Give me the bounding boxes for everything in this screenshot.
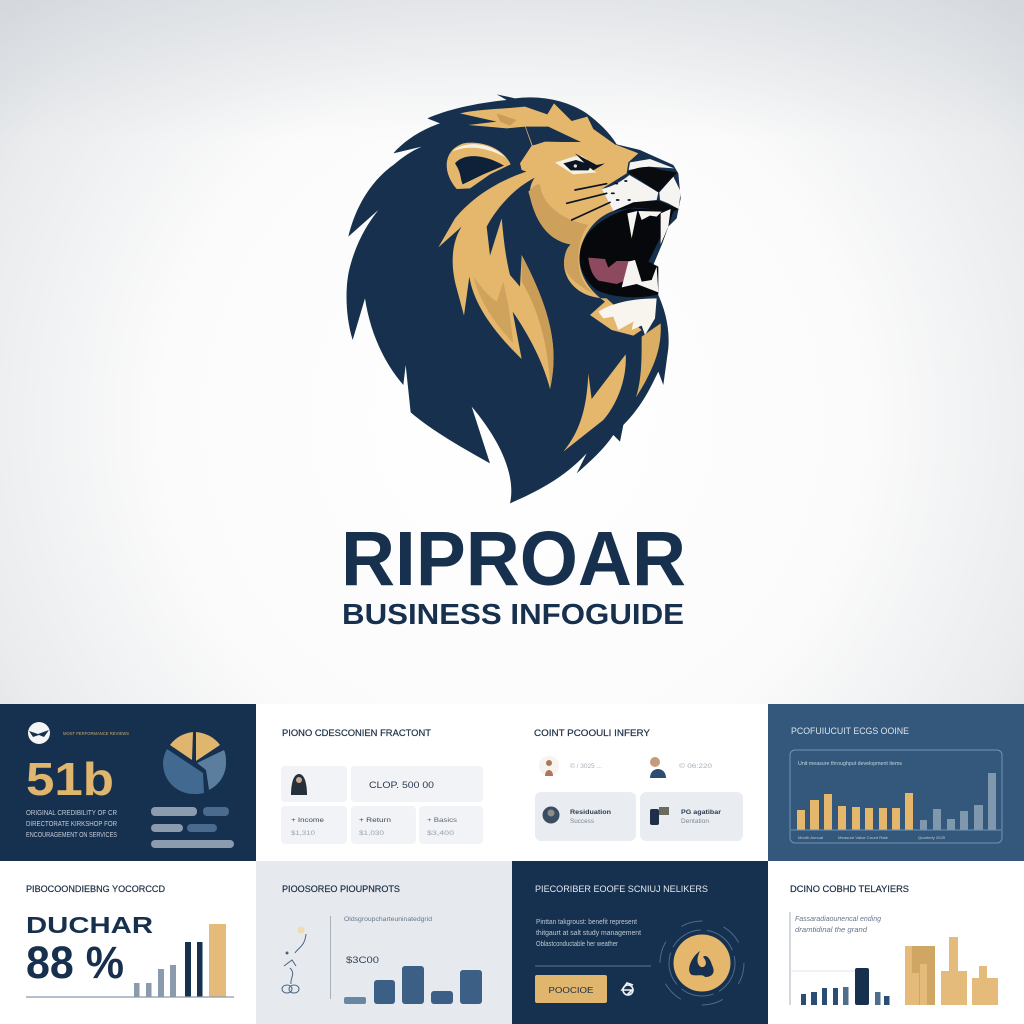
divider (535, 965, 651, 967)
panel: contact cards (256, 704, 512, 861)
profile card two (640, 792, 743, 841)
gold caption: MOST PERFORMANCE REVIEWS (63, 731, 129, 736)
heading: PCOFUIUCUIT ECGS OOINE (791, 726, 909, 737)
panel: bar chart blue (768, 704, 1024, 861)
lion mane silhouette (347, 94, 681, 503)
info cards (281, 766, 483, 844)
button: POOCIOE (548, 985, 594, 995)
card details: $1,310 (291, 831, 316, 837)
panel: lion call to action (512, 861, 768, 1024)
heading: DCINO COBHD TELAYIERS (790, 884, 909, 895)
title: RIPROAR (341, 516, 686, 602)
heading: PIONO CDESCONIEN FRACTONT (282, 728, 431, 739)
value: $3C00 (346, 955, 379, 966)
card details: $3,400 (427, 831, 455, 837)
card details: + Income (291, 818, 325, 824)
heading: PIBOCOONDIEBNG YOCORCCD (26, 884, 165, 895)
profile card one: Residuation (570, 809, 611, 816)
panel: mixed bar chart (768, 861, 1024, 1024)
description text (536, 919, 641, 948)
chart caption: Unit measure throughput development items (798, 761, 902, 767)
gold bars (905, 937, 998, 1005)
description text: DIRECTORATE KIRKSHOP FOR (26, 821, 117, 828)
panel: percentage metric (0, 861, 256, 1024)
lion whisker lines (567, 181, 630, 220)
profile card two: PG agatibar (681, 809, 722, 816)
caption: Oldsgroupcharteuninatedgrid (344, 917, 432, 923)
lion face (520, 142, 642, 336)
card details (291, 818, 457, 837)
axis (789, 912, 791, 1005)
big gold number: 51b (26, 753, 114, 805)
person two (650, 757, 712, 778)
lion side mane (438, 168, 554, 389)
lion nose (627, 167, 677, 192)
heading: COINT PCOOULI INFERY (534, 728, 651, 739)
lion snout top (629, 159, 674, 170)
card details: + Return (359, 818, 391, 824)
card details: + Basics (427, 818, 457, 824)
lion ear (447, 143, 511, 189)
axis labels: Measure Value Count Rate (838, 835, 889, 840)
lion upper jaw line (613, 201, 679, 244)
bar chart (344, 966, 482, 1004)
chart axis (791, 829, 1001, 831)
icon: lion badge (28, 722, 50, 744)
gold bars (797, 793, 913, 830)
heading: PIECORIBER EOOFE SCNIUJ NELIKERS (535, 884, 708, 895)
person one (539, 756, 602, 776)
icon: portrait (291, 774, 307, 795)
description text (26, 810, 117, 839)
subtitle: BUSINESS INFOGUIDE (342, 599, 684, 631)
person two: © 06:220 (679, 762, 712, 770)
button (535, 975, 607, 1003)
description text: Oblastconductable her weather (536, 941, 619, 948)
lion chin (598, 298, 657, 335)
lion lower mane accents (563, 354, 626, 452)
navy bars (790, 968, 890, 1005)
panel: proposed products (256, 861, 512, 1024)
grey bars (920, 773, 996, 830)
caption (795, 916, 881, 934)
lion muzzle right (659, 177, 681, 209)
card details: $1,030 (359, 831, 385, 837)
lion cheek shadow (528, 184, 593, 293)
caption: dramtidinal the grand (795, 927, 868, 934)
lion open mouth (580, 208, 665, 297)
lion muzzle (602, 175, 658, 211)
description text: Pinttan takgroust: benefit represent (536, 919, 637, 926)
lion tongue (588, 258, 641, 284)
profile card one: Success (570, 819, 594, 825)
icon: line doodle (282, 926, 306, 993)
icon: small glyph (622, 983, 633, 995)
lion teeth (622, 209, 671, 292)
description text: ORIGINAL CREDIBILITY OF CR (26, 810, 117, 817)
lion eye (555, 150, 607, 174)
axis labels: Quarterly 2025 (918, 835, 946, 840)
divider (330, 916, 332, 999)
axis labels: Month Annual (798, 835, 823, 840)
metric label: DUCHAR (26, 912, 153, 938)
profile card two: Dentation (681, 819, 709, 825)
chart frame (790, 750, 1002, 843)
legend bars (151, 807, 234, 848)
panel: people inventory (512, 704, 768, 861)
panel: pie chart metric (0, 704, 256, 861)
circular badge (660, 921, 744, 1005)
top mane shadow (497, 113, 517, 126)
caption: Fassaradiaounencal ending (795, 916, 881, 923)
heading: PIOOSOREO PIOUPNROTS (282, 884, 400, 895)
metric value: 88 % (26, 937, 124, 988)
description text: ENCOURAGEMENT ON SERVICES (26, 832, 117, 839)
lion side mane shadow (473, 255, 554, 389)
lion top mane (460, 103, 617, 150)
description text: thitgaurt at salt study management (536, 930, 641, 937)
background (0, 0, 1024, 704)
pie chart (163, 732, 226, 794)
profile card one (535, 792, 636, 841)
axis labels (798, 835, 946, 840)
bar chart (26, 924, 234, 997)
mane gap (526, 127, 582, 146)
card value: CLOP. 500 00 (369, 780, 434, 791)
person one: © / 3025 ... (570, 762, 602, 770)
icon: roaring lion head logo (347, 94, 681, 503)
